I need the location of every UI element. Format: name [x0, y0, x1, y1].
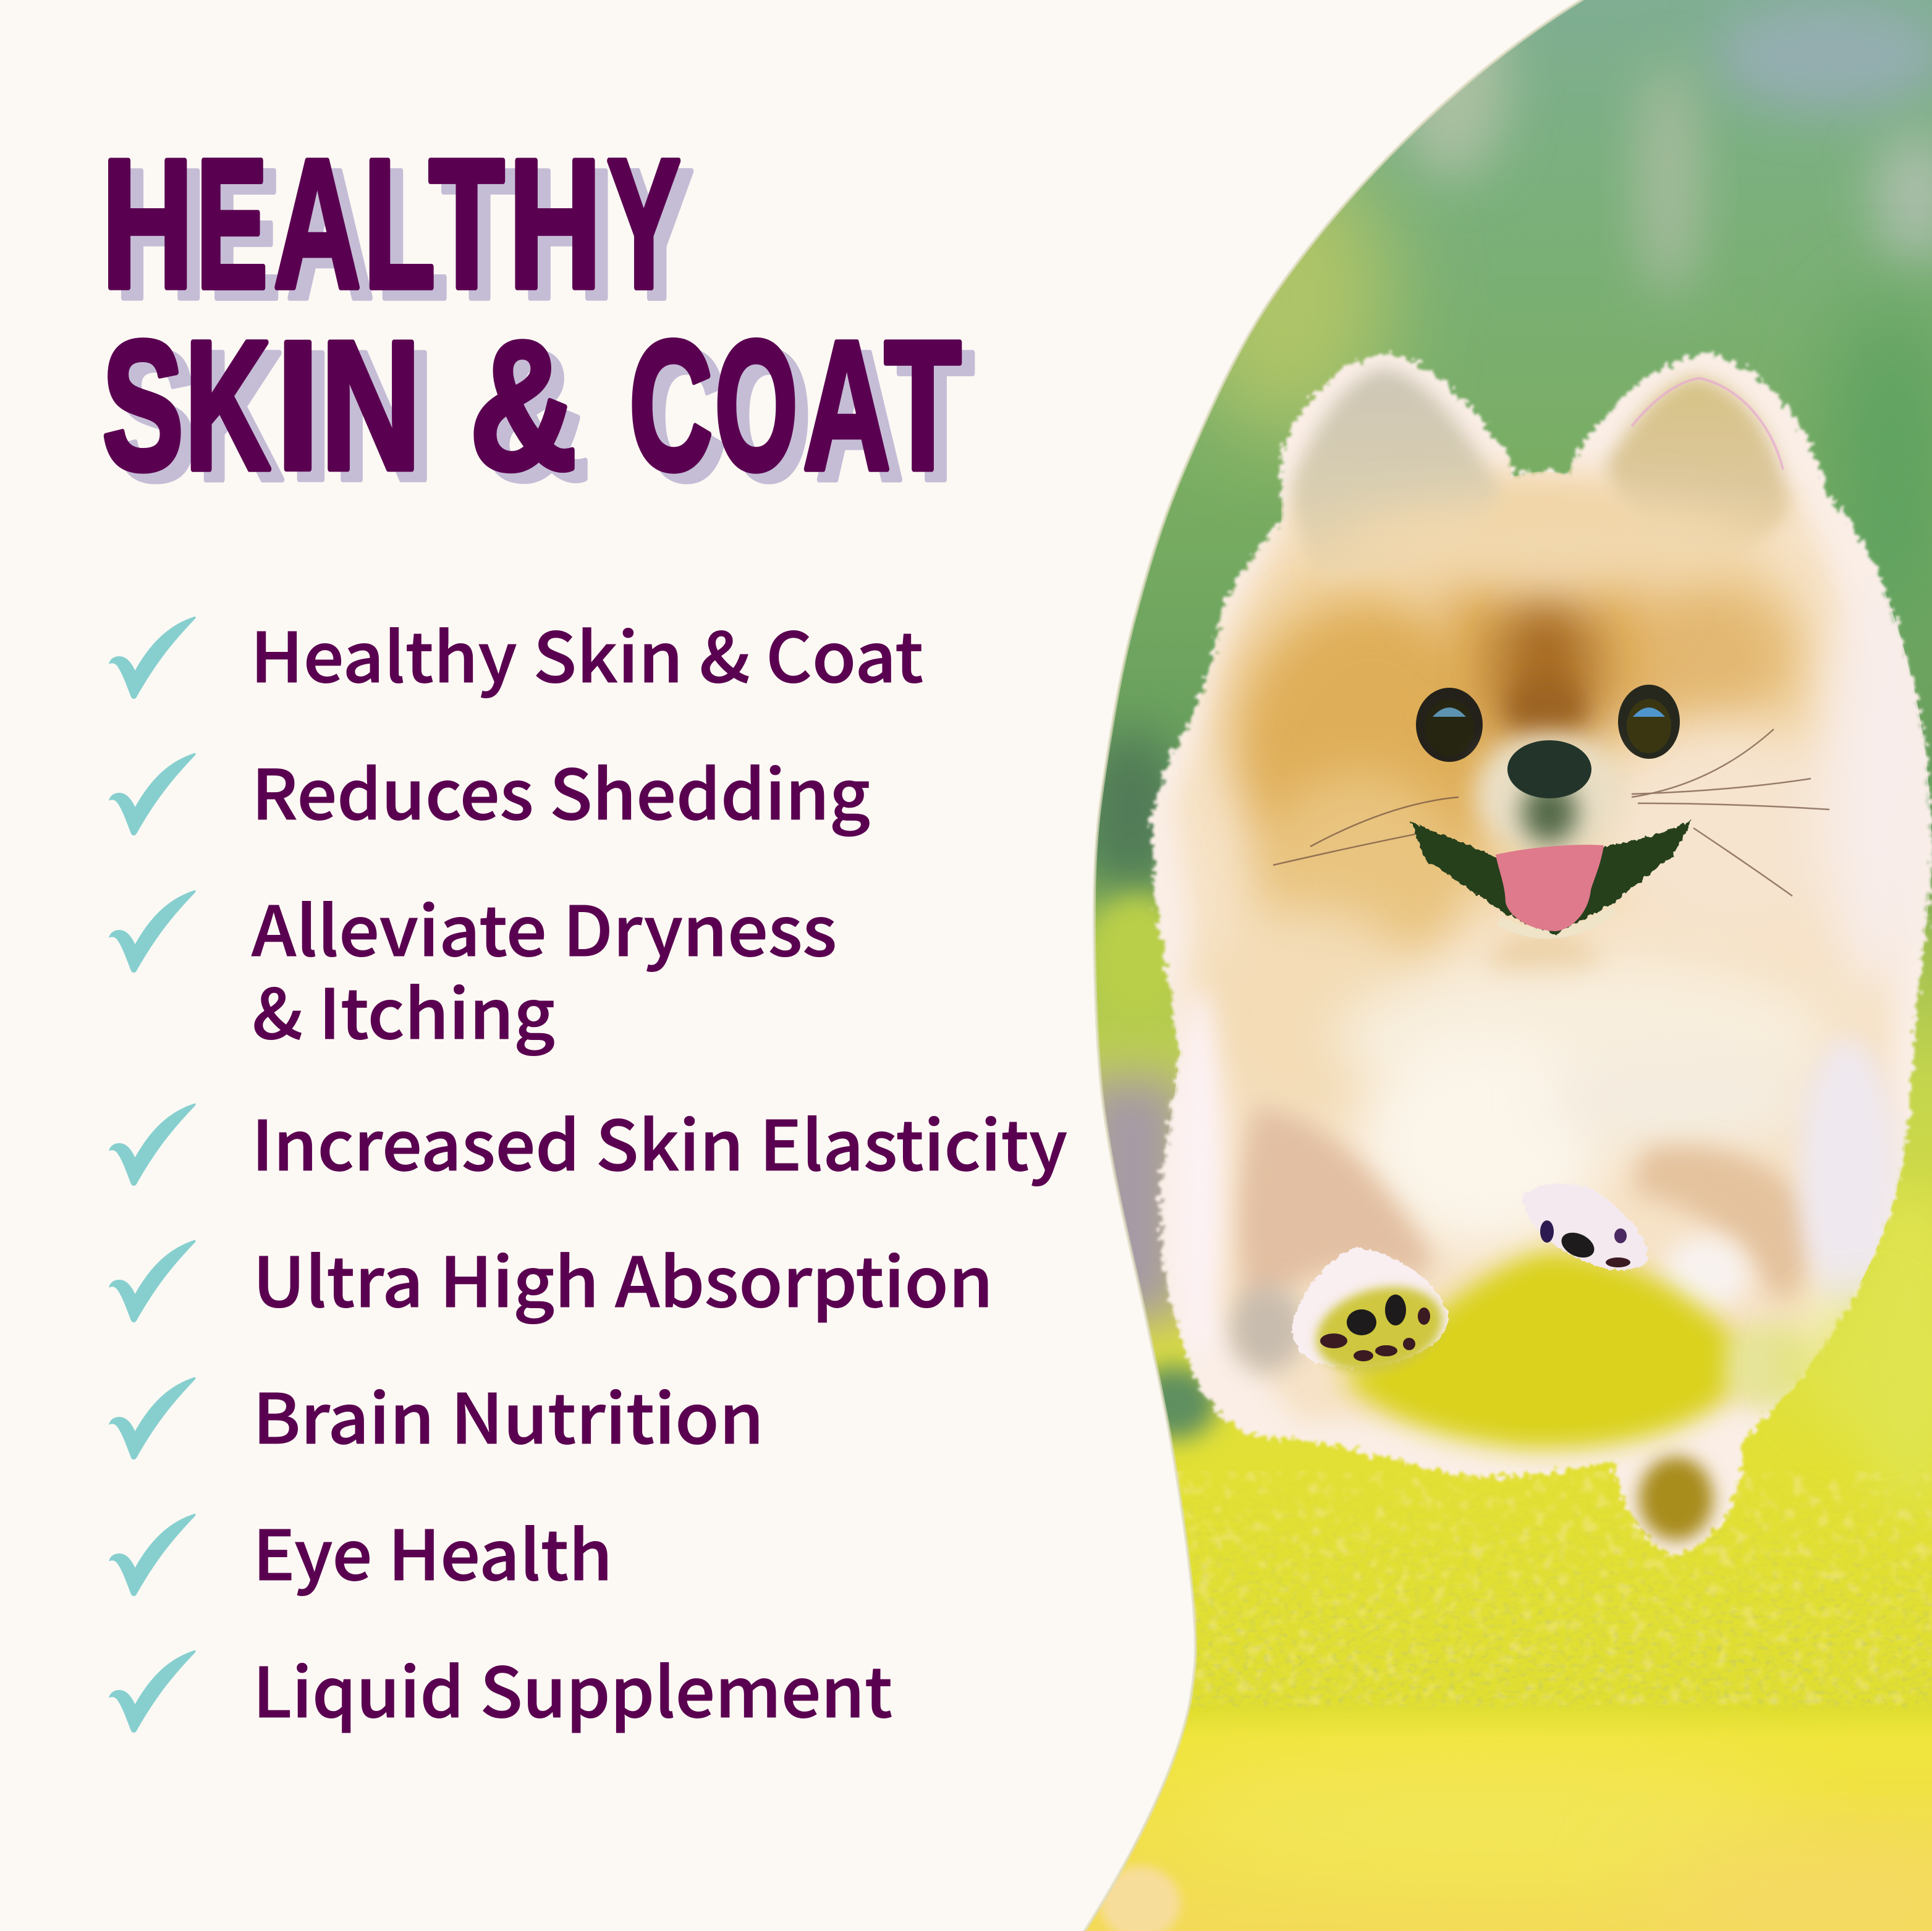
icon: teal check mark — [109, 1377, 196, 1460]
text: Eye Health — [253, 1500, 612, 1600]
title main text: H — [509, 120, 601, 327]
icon: teal check mark — [109, 617, 196, 699]
dog: mouth — [1410, 820, 1692, 934]
item: Eye Health — [109, 1500, 612, 1600]
dog: body base colouring — [1174, 482, 1897, 1421]
title shadow: S — [115, 313, 197, 519]
item: Liquid Supplement — [109, 1637, 892, 1737]
title shadow: O — [727, 313, 811, 519]
title main text: N — [320, 303, 422, 509]
title main text: I — [276, 303, 320, 509]
title main text: T — [884, 303, 961, 509]
photo: pomeranian dog — [1152, 354, 1932, 1556]
benefits checklist — [109, 602, 1067, 1737]
dog: right ear inner — [1605, 377, 1789, 556]
dog: tongue — [1496, 845, 1604, 931]
title main text: A — [273, 122, 361, 327]
dog: lower lip — [1499, 910, 1614, 934]
dog: left eye — [1416, 688, 1483, 762]
title shadow: T — [442, 131, 517, 337]
title shadow: L — [376, 132, 448, 337]
item: Increased Skin Elasticity — [109, 1091, 1067, 1190]
dog: lower-right edge fading into background — [1792, 1298, 1928, 1434]
icon: teal check mark — [109, 1650, 196, 1733]
photo: background meadow — [1051, 0, 1932, 1931]
text: Increased Skin Elasticity — [252, 1091, 1067, 1190]
title shadow: C — [642, 313, 726, 518]
item: Brain Nutrition — [109, 1364, 764, 1463]
title main text: E — [196, 120, 268, 327]
dog: right eye — [1618, 685, 1680, 759]
item: Ultra High Absorption — [109, 1227, 993, 1327]
dog: head fur — [1230, 482, 1823, 902]
title shadow: & — [482, 314, 590, 519]
title shadow: I — [289, 314, 333, 519]
text: Liquid Supplement — [253, 1637, 892, 1737]
title shadow: Y — [620, 132, 693, 337]
title shadow: A — [287, 132, 374, 337]
dog: right front paw — [1522, 1184, 1648, 1270]
dog: right ear pink rim — [1632, 378, 1783, 470]
text: Alleviate Dryness — [252, 876, 837, 976]
title main text: Y — [607, 122, 680, 327]
title shadow: K — [198, 314, 284, 519]
dog: left front paw — [1292, 1248, 1452, 1386]
item: Healthy Skin & Coat — [109, 602, 923, 702]
text: & Itching — [252, 959, 555, 1058]
title: Healthy Skin & Coat — [101, 120, 974, 519]
item: Reduces Shedding — [109, 740, 870, 839]
title main text — [101, 120, 961, 509]
icon: teal check mark — [109, 1240, 196, 1322]
title shadow: H — [115, 132, 206, 337]
title shadow: N — [334, 314, 434, 519]
title shadow: H — [522, 131, 614, 337]
title shadow: A — [816, 313, 904, 519]
title main text: S — [102, 302, 184, 509]
dog: chest fur — [1193, 908, 1428, 1118]
dog: yellow belly reflection — [1341, 1251, 1749, 1449]
item: Alleviate Dryness & Itching — [109, 876, 837, 1058]
title shadow: E — [209, 131, 281, 337]
title shadow — [115, 131, 974, 519]
title main text: H — [101, 121, 193, 327]
title shadow: T — [897, 314, 974, 519]
text: Reduces Shedding — [252, 740, 870, 839]
title main text: O — [714, 302, 798, 509]
title main text: & — [469, 303, 577, 509]
icon: teal check mark — [109, 890, 196, 973]
icon: teal check mark — [109, 1514, 196, 1596]
text: Ultra High Absorption — [253, 1227, 993, 1327]
text: Brain Nutrition — [253, 1364, 764, 1463]
title main text: K — [185, 303, 271, 509]
icon: teal check mark — [109, 1104, 196, 1186]
dog: fur silhouette — [1152, 354, 1932, 1556]
title main text: L — [363, 122, 435, 327]
dog: muzzle — [1475, 732, 1624, 856]
dog: nose and chin shadow — [1507, 740, 1591, 843]
title main text: A — [803, 302, 891, 509]
title main text: C — [629, 303, 713, 508]
dog: blend of ears into head — [1341, 501, 1749, 587]
dog: whiskers — [1273, 729, 1829, 896]
icon: teal check mark — [109, 753, 196, 835]
title main text: T — [429, 120, 504, 326]
text: Healthy Skin & Coat — [250, 602, 923, 702]
dog: left ear inner — [1293, 369, 1502, 581]
